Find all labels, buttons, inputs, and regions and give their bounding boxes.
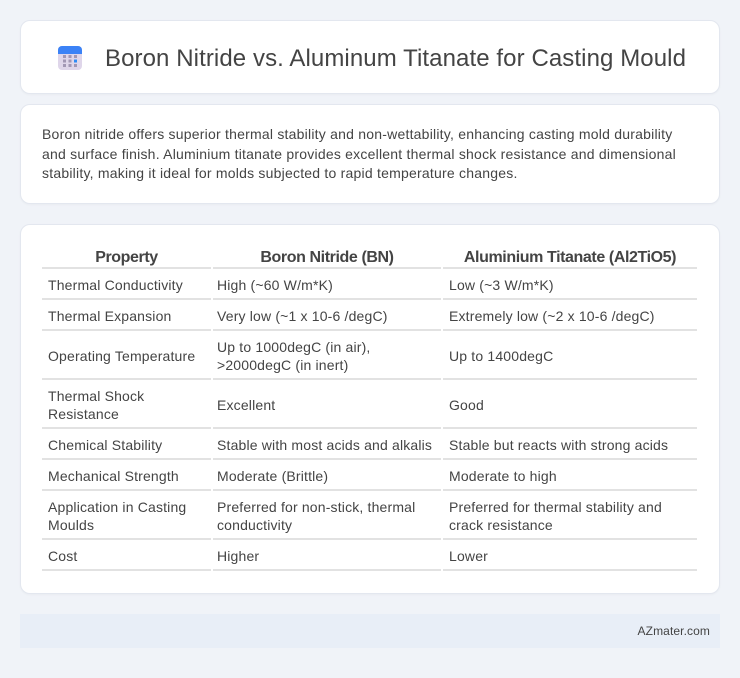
panel: comparison table bbox=[20, 224, 720, 594]
table header: Boron Nitride: Boron Nitride (BN) bbox=[260, 249, 394, 266]
panel: summary text bbox=[20, 104, 720, 204]
comparison table: Stable with most acids and alkalis bbox=[217, 437, 432, 453]
row: Mechanical Strength: Mechanical Strength bbox=[48, 468, 179, 484]
comparison table: Low (~3 W/m*K) bbox=[449, 277, 554, 293]
comparison table: Extremely low (~2 x 10-6 /degC) bbox=[449, 308, 655, 324]
comparison table: Very low (~1 x 10-6 /degC) bbox=[217, 308, 388, 324]
table header: Aluminium Titanate: Aluminium Titanate (Al2TiO5) bbox=[464, 249, 676, 266]
comparison table: Up to 1000degC (in air), bbox=[217, 339, 370, 355]
header panel bbox=[20, 20, 720, 94]
comparison table: Excellent bbox=[217, 397, 275, 413]
summary paragraph: stability, making it ideal for molds subjected to rapid temperature changes. bbox=[42, 165, 518, 181]
comparison table: conductivity bbox=[217, 517, 292, 533]
row: Application in Casting Moulds bbox=[48, 499, 186, 533]
comparison table: Higher bbox=[217, 548, 259, 564]
comparison table: High (~60 W/m*K) bbox=[217, 277, 333, 293]
comparison table: Up to 1400degC bbox=[449, 348, 553, 364]
row: Application in Casting Moulds: Moulds bbox=[48, 517, 94, 533]
footer bar bbox=[20, 614, 720, 648]
title: Boron Nitride vs. Aluminum Titanate for Casting Mould bbox=[105, 45, 686, 72]
row: Thermal Shock Resistance: Resistance bbox=[48, 406, 119, 422]
summary paragraph: and surface finish. Aluminium titanate provides excellent thermal shock resistance and dimensional bbox=[42, 146, 676, 162]
row: Application in Casting Moulds: Application in Casting bbox=[48, 499, 186, 515]
comparison table: Moderate (Brittle) bbox=[217, 468, 328, 484]
comparison table: Preferred for thermal stability and bbox=[449, 499, 662, 515]
row: Thermal Shock Resistance bbox=[48, 388, 144, 422]
comparison table: Good bbox=[449, 397, 484, 413]
row: Chemical Stability: Chemical Stability bbox=[48, 437, 162, 453]
summary paragraph bbox=[42, 126, 676, 181]
footer credit: AZmater.com bbox=[638, 624, 710, 638]
comparison table: crack resistance bbox=[449, 517, 553, 533]
row: Operating Temperature: Operating Temperature bbox=[48, 348, 195, 364]
row: Cost: Cost bbox=[48, 548, 77, 564]
row: Thermal Shock Resistance: Thermal Shock bbox=[48, 388, 144, 404]
icon: calendar bbox=[58, 46, 82, 70]
row: Thermal Conductivity: Thermal Conductivity bbox=[48, 277, 183, 293]
table header: Property: Property bbox=[95, 249, 158, 266]
comparison table: Moderate to high bbox=[449, 468, 557, 484]
comparison table: >2000degC (in inert) bbox=[217, 357, 348, 373]
comparison table: Stable but reacts with strong acids bbox=[449, 437, 668, 453]
summary paragraph: Boron nitride offers superior thermal stability and non-wettability, enhancing casting mold durability bbox=[42, 126, 672, 142]
row: Thermal Expansion: Thermal Expansion bbox=[48, 308, 172, 324]
comparison table: Preferred for non-stick, thermal bbox=[217, 499, 415, 515]
comparison table: Lower bbox=[449, 548, 488, 564]
